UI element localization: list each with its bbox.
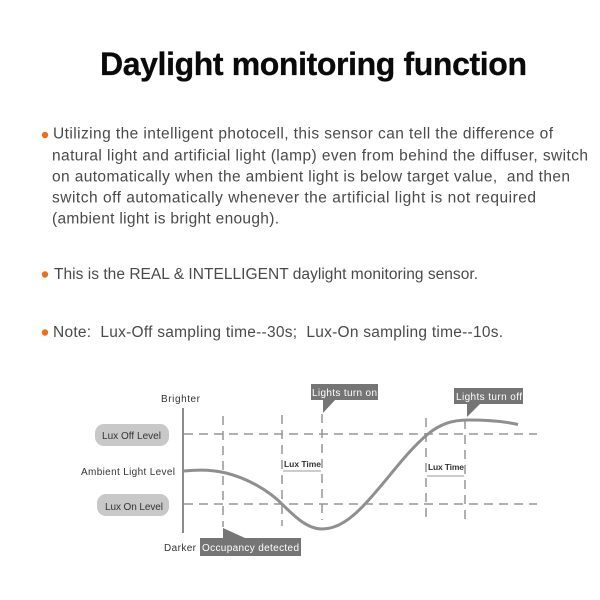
lux time span: right xyxy=(427,462,464,476)
callout: occupancy detected xyxy=(200,528,301,556)
text block: photocell description: (ambient light is bright enough). xyxy=(52,210,279,228)
text block: sampling time note: Note: Lux-Off sampling time--30s; Lux-On sampling time--10s. xyxy=(53,324,503,341)
callout: occupancy detected: Occupancy detected xyxy=(202,543,299,554)
axis label: darker: Darker xyxy=(164,543,197,554)
text block: photocell description: on automatically when the ambient light is below target value, and then xyxy=(52,168,570,186)
chart axis xyxy=(182,408,184,533)
pill: lux off level xyxy=(95,424,169,446)
callout: lights turn off xyxy=(454,388,523,417)
chart: ambient light level over time xyxy=(81,384,537,556)
event dashed markers xyxy=(223,414,465,527)
pill: lux off level: Lux Off Level xyxy=(102,431,161,442)
light level curve xyxy=(184,420,518,529)
callout: lights turn off: Lights turn off xyxy=(456,392,522,403)
lux time span: left: Lux Time xyxy=(284,459,321,469)
title: Daylight monitoring function xyxy=(100,46,527,82)
text block: photocell description xyxy=(42,126,588,228)
text block: photocell description: Utilizing the intelligent photocell, this sensor can tell the difference of xyxy=(53,126,554,142)
axis label: brighter: Brighter xyxy=(161,394,201,405)
lux time span: right: Lux Time xyxy=(428,462,464,472)
label: ambient light level: Ambient Light Level xyxy=(81,467,175,478)
pill: lux on level: Lux On Level xyxy=(105,502,163,513)
callout: lights turn on xyxy=(311,384,378,413)
text block: real and intelligent sensor: This is the REAL & INTELLIGENT daylight monitoring sensor. xyxy=(54,266,478,283)
text block: photocell description: switch off automatically whenever the artificial light is not required xyxy=(52,190,536,206)
text block: photocell description: natural light and artificial light (lamp) even from behind the diffuser, switch xyxy=(52,148,588,164)
pill: lux on level xyxy=(97,494,169,516)
callout: lights turn on: Lights turn on xyxy=(312,388,377,399)
lux threshold dashed lines xyxy=(184,434,537,504)
